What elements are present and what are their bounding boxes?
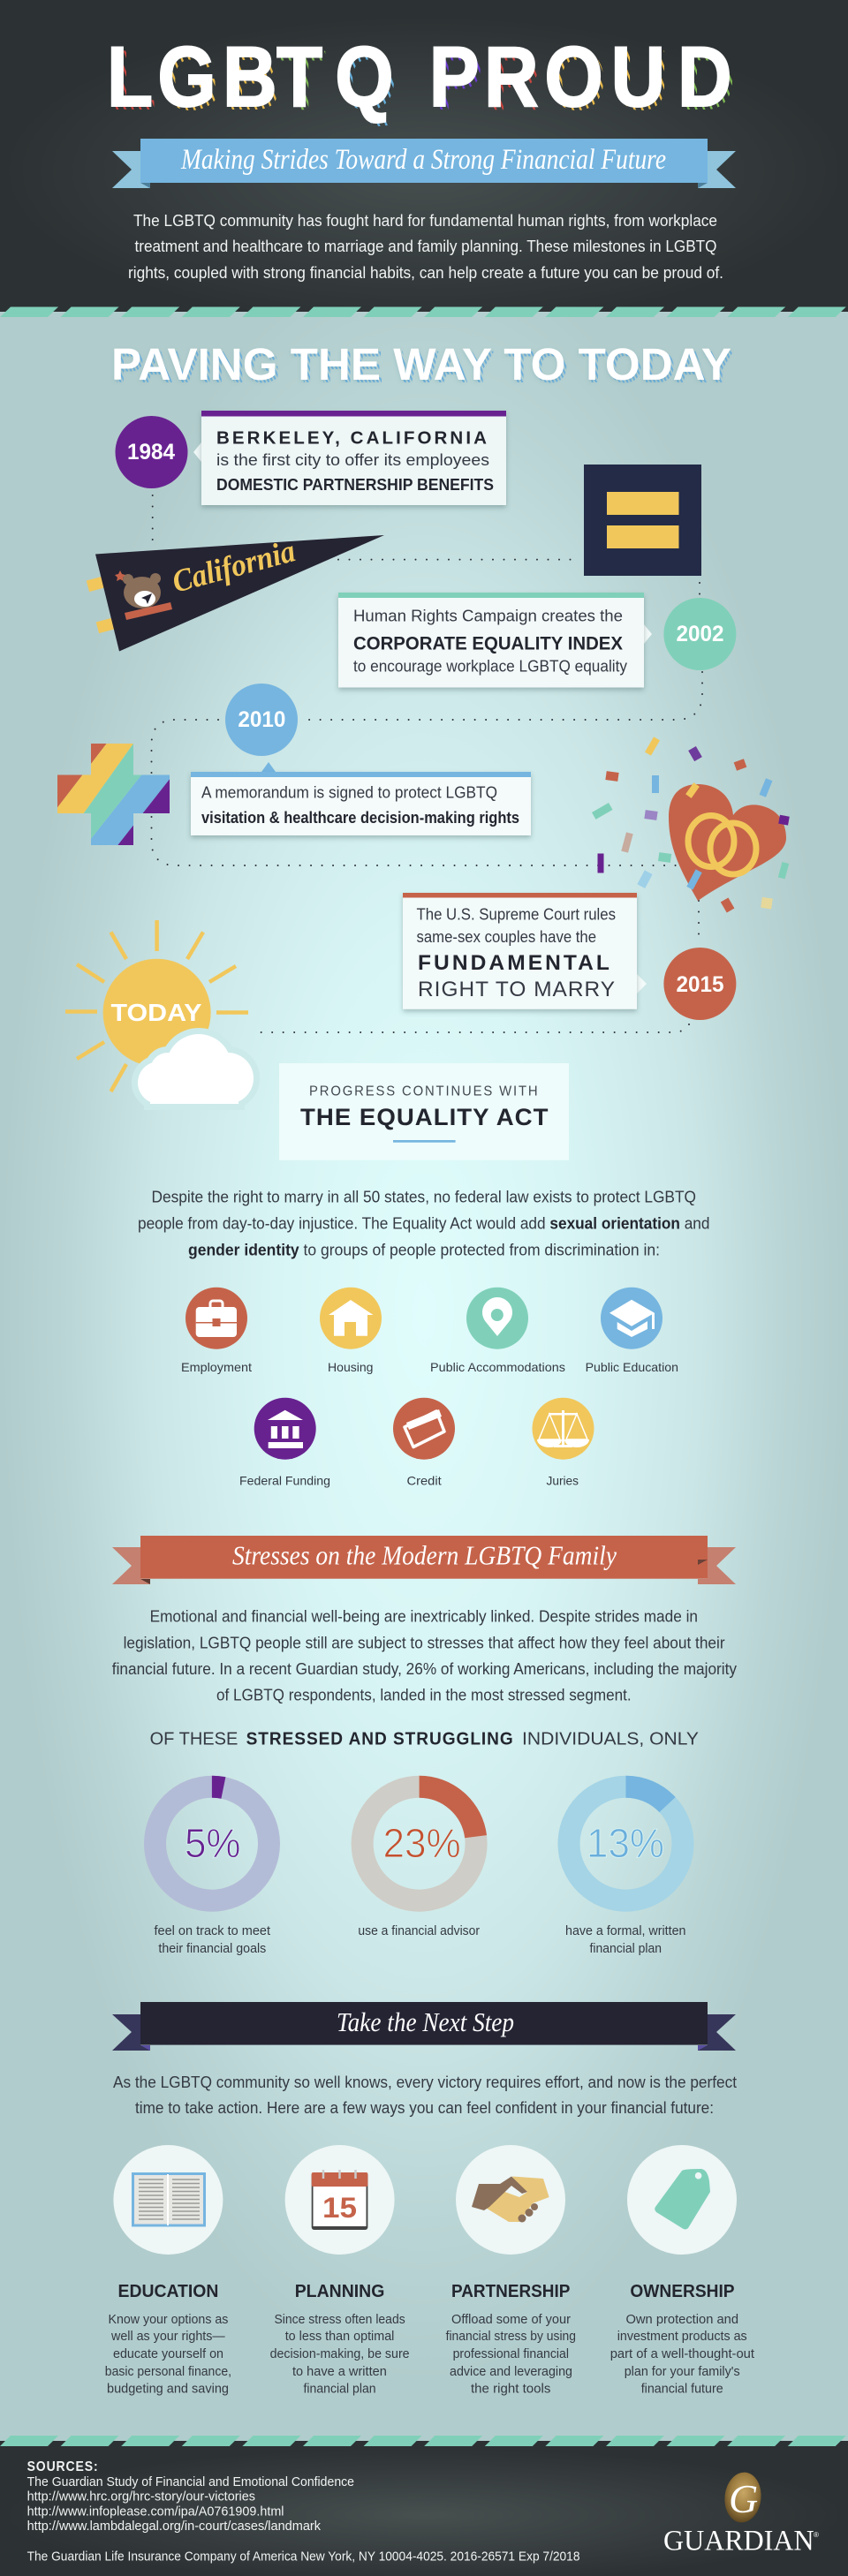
title: L <box>110 33 156 128</box>
icon: handshake <box>456 2145 565 2255</box>
column: planning: financial plan <box>304 2381 376 2396</box>
milestone 2002 <box>338 593 736 687</box>
donut chart: 23 percent <box>358 1787 480 1938</box>
icon: public accommodations <box>430 1288 565 1374</box>
column: education: EDUCATION <box>118 2282 218 2301</box>
title: B <box>226 33 281 128</box>
callout 1984: is the first city to offer its employees <box>216 451 489 469</box>
milestone 2015 <box>403 893 736 1020</box>
column: planning: to less than optimal <box>285 2329 394 2344</box>
year circle 2015 <box>663 948 736 1020</box>
title: D <box>681 33 736 128</box>
callout 2002: Human Rights Campaign creates the <box>353 608 623 625</box>
donut chart: 23 percent: 23% <box>383 1820 461 1866</box>
icon: employment <box>181 1288 252 1374</box>
column: ownership: investment products as <box>617 2329 747 2344</box>
callout 2015: The U.S. Supreme Court rules <box>417 906 616 924</box>
equality act paragraph: Despite the right to marry in all 50 states, no federal law exists to protect LGBTQ <box>152 1189 696 1206</box>
sources: The Guardian Study of Financial and Emotional Confidence <box>27 2474 354 2489</box>
callout 2002: CORPORATE EQUALITY INDEX <box>353 634 623 654</box>
panel: the equality act: THE EQUALITY ACT <box>300 1104 549 1130</box>
icon: heart with rings and confetti <box>592 737 790 913</box>
stresses paragraph: legislation, LGBTQ people still are subject to stresses that affect how they feel about their <box>124 1635 725 1652</box>
equality act paragraph: people from day-to-day injustice. The Equality Act would add sexual orientation and <box>138 1215 709 1233</box>
milestone 2010 <box>191 684 531 835</box>
column: partnership: the right tools <box>471 2381 550 2396</box>
stresses paragraph: financial future. In a recent Guardian study, 26% of working Americans, including the majority <box>112 1660 737 1678</box>
donut chart: 5 percent: 5% <box>185 1820 240 1866</box>
column: partnership: advice and leveraging <box>450 2364 572 2379</box>
icon: employment: Employment <box>181 1360 252 1374</box>
sources <box>27 2459 580 2565</box>
subtitle ribbon <box>112 139 736 188</box>
header stripe band <box>0 307 848 317</box>
callout 1984 <box>193 411 506 505</box>
stressed and struggling subheading <box>150 1730 699 1749</box>
donut chart: 13 percent: financial plan <box>590 1941 662 1956</box>
column: education: educate yourself on <box>113 2346 223 2361</box>
column: planning: to have a written <box>292 2364 387 2379</box>
heart <box>669 784 786 901</box>
stresses paragraph <box>112 1608 737 1704</box>
icon: federal funding: Federal Funding <box>239 1474 330 1488</box>
sources: SOURCES: <box>27 2459 99 2474</box>
column: ownership: plan for your family's <box>625 2364 740 2379</box>
callout 1984: BERKELEY, CALIFORNIA <box>216 429 489 449</box>
next step paragraph: time to take action. Here are a few ways you can feel confident in your financial future: <box>135 2099 714 2117</box>
stresses paragraph: of LGBTQ respondents, landed in the most stressed segment. <box>216 1687 632 1704</box>
donut chart: 13 percent: have a formal, written <box>565 1923 685 1938</box>
icon: credit <box>393 1398 455 1488</box>
sources: http://www.lambdalegal.org/in-court/cases/landmark <box>27 2519 321 2534</box>
equality act paragraph: gender identity to groups of people protected from discrimination in: <box>188 1242 660 1259</box>
icon: credit: Credit <box>406 1474 442 1488</box>
column: planning <box>270 2145 410 2396</box>
icon: price tag <box>627 2145 737 2255</box>
protected category icons <box>181 1288 678 1488</box>
next step paragraph <box>113 2074 737 2117</box>
icon: california pennant: California <box>169 533 299 600</box>
title: LGBTQ PROUD <box>107 29 732 125</box>
column: ownership: Own protection and <box>625 2312 738 2327</box>
panel: footer <box>0 2436 848 2576</box>
icon: public education <box>586 1288 678 1374</box>
header background <box>0 0 848 312</box>
section ribbon: stresses: Stresses on the Modern LGBTQ Family <box>232 1540 617 1571</box>
next step paragraph: As the LGBTQ community so well knows, every victory requires effort, and now is the perfect <box>113 2074 737 2091</box>
donut chart: 5 percent: their financial goals <box>158 1941 266 1956</box>
bear head <box>123 573 161 608</box>
sources: The Guardian Life Insurance Company of America New York, NY 10004-4025. 2016-26571 Exp 7/2018 <box>27 2550 580 2565</box>
callout 1984: DOMESTIC PARTNERSHIP BENEFITS <box>216 476 494 494</box>
year circle 2002: 2002 <box>677 622 724 646</box>
panel: the equality act <box>279 1063 569 1160</box>
title: Q <box>338 33 398 128</box>
column: education: Know your options as <box>108 2312 228 2327</box>
callout 2010 <box>191 762 531 835</box>
column: education: well as your rights— <box>110 2329 225 2344</box>
callout 2002: to encourage workplace LGBTQ equality <box>353 658 627 676</box>
column: planning: Since stress often leads <box>274 2312 405 2327</box>
intro paragraph <box>128 212 723 282</box>
donut chart: 13 percent <box>565 1787 685 1956</box>
panel: the equality act: PROGRESS CONTINUES WITH <box>309 1084 539 1099</box>
icon: book <box>113 2145 223 2255</box>
title: P <box>433 33 483 128</box>
column: planning: decision-making, be sure <box>270 2346 410 2361</box>
icon: human rights campaign logo <box>584 465 701 576</box>
icon: federal funding <box>239 1398 330 1488</box>
donut chart: 13 percent: 13% <box>587 1820 664 1866</box>
year circle 1984 <box>115 416 187 488</box>
wedding rings <box>688 816 734 867</box>
intro paragraph: treatment and healthcare to marriage and family planning. These milestones in LGBTQ <box>134 238 717 255</box>
confetti <box>592 737 789 913</box>
logo: guardian <box>663 2471 819 2557</box>
stressed and struggling subheading: STRESSED AND STRUGGLING <box>246 1730 514 1749</box>
title: R <box>488 33 542 128</box>
column: partnership: financial stress by using <box>446 2329 576 2344</box>
icon: calendar: 15 <box>322 2192 357 2224</box>
callout 2015: FUNDAMENTAL <box>418 951 612 975</box>
cloud halo <box>138 1034 254 1104</box>
title: T <box>280 33 326 128</box>
column: planning: PLANNING <box>295 2282 384 2301</box>
panel: header <box>0 0 848 317</box>
column: partnership <box>446 2145 576 2396</box>
callout 2015: same-sex couples have the <box>417 928 596 946</box>
logo: guardian: G <box>729 2476 758 2521</box>
title: G <box>161 33 220 128</box>
icon: housing <box>320 1288 382 1374</box>
intro paragraph: The LGBTQ community has fought hard for fundamental human rights, from workplace <box>133 212 717 230</box>
equality act paragraph <box>138 1189 709 1259</box>
logo: guardian: ® <box>814 2531 819 2539</box>
donut chart: 23 percent: use a financial advisor <box>358 1923 480 1938</box>
sun rays <box>65 920 248 1092</box>
title: U <box>615 33 669 128</box>
stressed and struggling subheading: INDIVIDUALS, ONLY <box>522 1730 699 1749</box>
year circle 2002 <box>663 598 736 670</box>
column: ownership: financial future <box>641 2381 723 2396</box>
subtitle ribbon: Making Strides Toward a Strong Financial Future <box>180 144 666 176</box>
year circle 2015: 2015 <box>677 972 724 997</box>
intro paragraph: rights, coupled with strong financial habits, can help create a future you can be proud of. <box>128 264 723 282</box>
column: partnership: PARTNERSHIP <box>451 2282 570 2301</box>
timeline dotted path <box>152 495 702 1032</box>
column: education <box>105 2145 231 2396</box>
column: education: basic personal finance, <box>105 2364 231 2379</box>
callout 2015 <box>403 893 647 1009</box>
callout 2010: visitation & healthcare decision-making rights <box>201 809 519 827</box>
donut chart: 5 percent: feel on track to meet <box>154 1923 271 1938</box>
sources: http://www.hrc.org/hrc-story/our-victories <box>27 2489 255 2504</box>
icon: housing: Housing <box>328 1360 373 1374</box>
column: ownership: part of a well-thought-out <box>610 2346 755 2361</box>
logo: guardian: GUARDIAN <box>663 2526 814 2557</box>
year circle 2010 <box>225 684 298 756</box>
year circle 1984: 1984 <box>127 440 175 465</box>
heading: paving the way to today: PAVING THE WAY TO TODAY <box>114 342 734 392</box>
stressed and struggling subheading: OF THESE <box>150 1730 238 1749</box>
heading: paving the way to today: PAVING THE WAY TO TODAY <box>111 339 731 389</box>
callout 2010: A memorandum is signed to protect LGBTQ <box>201 784 497 802</box>
icon: calendar <box>285 2145 395 2255</box>
column: partnership: Offload some of your <box>451 2312 571 2327</box>
icon: public accommodations: Public Accommodations <box>430 1360 565 1374</box>
callout 2002 <box>338 593 652 687</box>
icon: rainbow medical cross <box>57 744 170 845</box>
title: O <box>548 33 607 128</box>
sources: http://www.infoplease.com/ipa/A0761909.html <box>27 2504 284 2519</box>
callout 2015: RIGHT TO MARRY <box>418 978 616 1001</box>
cloud <box>138 1034 254 1104</box>
icon: juries: Juries <box>546 1474 579 1488</box>
icon: california pennant <box>87 533 384 652</box>
icon: sun with cloud, today <box>65 920 254 1104</box>
stresses paragraph: Emotional and financial well-being are inextricably linked. Despite strides made in <box>150 1608 698 1626</box>
sun disc <box>103 959 211 1067</box>
section ribbon: take the next step: Take the Next Step <box>337 2006 514 2037</box>
donut chart: 5 percent <box>154 1787 271 1956</box>
column: ownership <box>610 2145 755 2396</box>
year circle 2010: 2010 <box>238 707 285 732</box>
icon: public education: Public Education <box>586 1360 678 1374</box>
section ribbon: take the next step <box>112 2002 736 2051</box>
column: ownership: OWNERSHIP <box>630 2282 735 2301</box>
milestone 1984 <box>115 411 506 505</box>
column: partnership: professional financial <box>453 2346 569 2361</box>
icon: juries <box>532 1398 594 1488</box>
section ribbon: stresses <box>112 1536 736 1584</box>
icon: sun with cloud, today: TODAY <box>111 999 202 1026</box>
column: education: budgeting and saving <box>107 2381 229 2396</box>
